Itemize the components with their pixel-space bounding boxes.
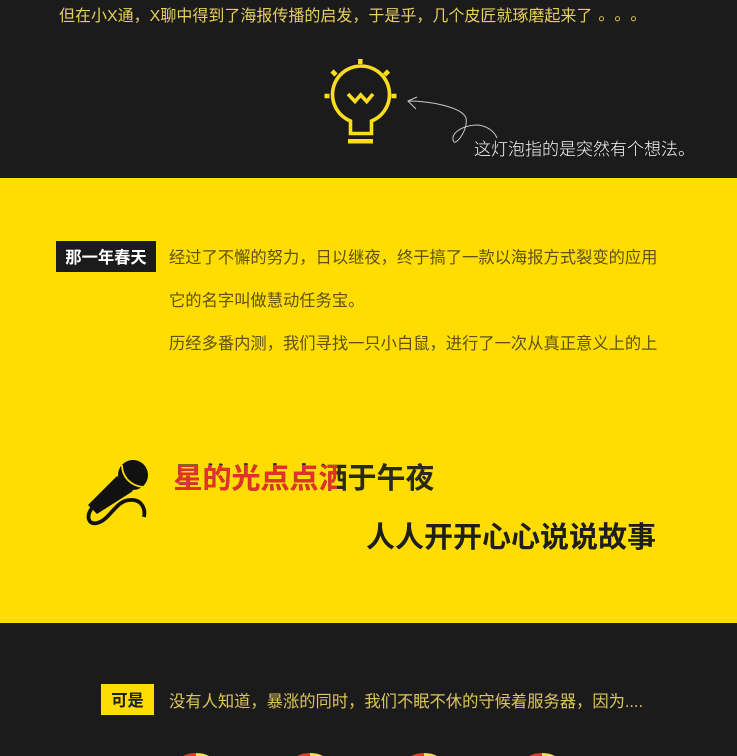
panel: bottom dark section	[0, 623, 737, 756]
panel: top dark section	[0, 0, 737, 178]
panel: yellow section	[0, 178, 737, 623]
arrow: hand-drawn pointer to bulb	[407, 96, 498, 143]
icon: light bulb	[324, 59, 396, 144]
headline line 1: 星的光点点洒于午夜	[174, 463, 435, 495]
paragraph line 1: 经过了不懈的努力，日以继夜，终于搞了一款以海报方式裂变的应用	[169, 249, 657, 267]
headline line 2: 人人开开心心说说故事	[366, 522, 656, 554]
label: 那一年春天	[56, 241, 156, 272]
paragraph line 2: 它的名字叫做慧动任务宝。	[169, 292, 364, 310]
body text: 没有人知道，暴涨的同时，我们不眠不休的守候着服务器，因为....	[169, 693, 643, 711]
label: 可是: 可是	[111, 692, 144, 710]
label: 可是	[101, 684, 154, 715]
paragraph line 3: 历经多番内测，我们寻找一只小白鼠，进行了一次从真正意义上的上	[169, 335, 657, 353]
handwritten annotation: 这灯泡指的是突然有个想法。	[474, 135, 695, 160]
label: 那一年春天: 那一年春天	[65, 249, 147, 267]
intro text: 但在小X通，X聊中得到了海报传播的启发，于是乎，几个皮匠就琢磨起来了 。。。	[59, 7, 646, 25]
